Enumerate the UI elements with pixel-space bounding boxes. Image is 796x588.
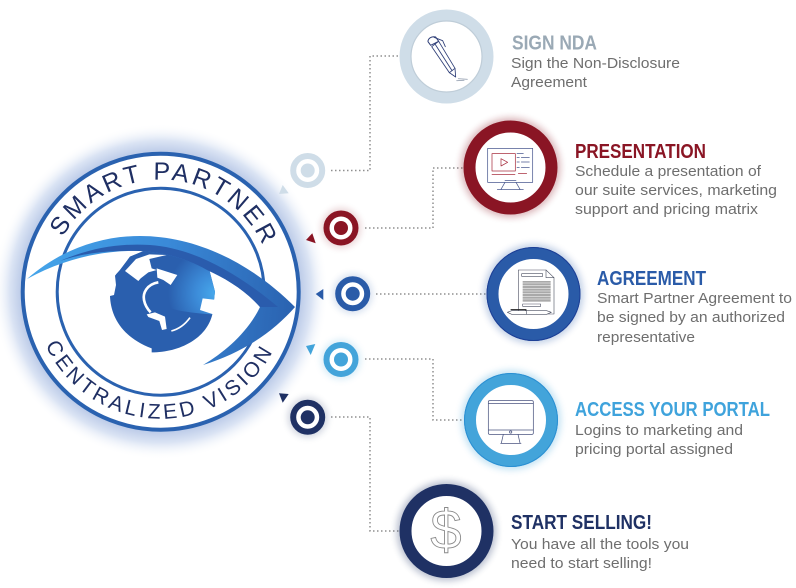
heading: sign NDA: SIGN NDA	[512, 32, 597, 54]
ring glow: access portal	[461, 370, 561, 470]
dotted connector: agreement	[376, 293, 487, 295]
icon: monitor	[488, 401, 533, 443]
ring: presentation	[470, 126, 552, 208]
description: access portal: Logins to marketing and	[575, 422, 743, 439]
badge text: bottom: CENTRALIZED VISION	[48, 341, 272, 419]
description: agreement: Smart Partner Agreement to	[597, 290, 792, 307]
ring: sign NDA	[406, 16, 488, 98]
description: agreement: representative	[597, 329, 695, 346]
description: start selling: need to start selling!	[511, 555, 652, 572]
badge text: top: SMART PARTNER	[50, 162, 276, 244]
ring: access portal	[470, 379, 552, 461]
ring glow: start selling	[396, 481, 496, 581]
step: access portal	[461, 370, 770, 470]
dotted connector: access portal	[365, 359, 464, 420]
step: start selling	[396, 481, 689, 581]
description: sign NDA: Agreement	[511, 74, 588, 91]
badge glow	[0, 124, 329, 460]
heading: start selling: START SELLING!	[511, 512, 652, 534]
description: presentation: our suite services, marketing	[575, 182, 777, 199]
heading: presentation: PRESENTATION	[575, 141, 706, 163]
badge: Smart Partner Centralized Vision	[0, 132, 320, 452]
node: presentation	[306, 208, 361, 248]
ring glow: agreement	[484, 244, 584, 344]
dotted connector: start selling	[331, 417, 400, 531]
step: agreement	[484, 244, 792, 346]
ring glow: presentation	[460, 118, 560, 218]
description: presentation: Schedule a presentation of	[575, 163, 762, 180]
icon: document	[507, 270, 554, 314]
dotted connector: presentation	[365, 168, 464, 228]
eyelid swoosh	[27, 236, 295, 365]
ring edge: access portal	[464, 374, 558, 466]
badge inner ring	[57, 188, 264, 395]
icon: video screen	[488, 148, 533, 190]
node: agreement	[316, 274, 373, 314]
dotted connector: sign NDA	[331, 56, 400, 170]
eyelid inner shade	[60, 245, 278, 307]
description: presentation: support and pricing matrix	[575, 201, 759, 218]
ring: start selling	[406, 490, 488, 572]
step: presentation	[460, 118, 777, 218]
icon: pen	[428, 37, 467, 81]
description: access portal: pricing portal assigned	[575, 441, 733, 458]
step: sign NDA	[406, 16, 680, 98]
ring edge: agreement	[487, 248, 580, 340]
node: sign NDA	[279, 156, 322, 194]
iris	[110, 248, 217, 352]
description: sign NDA: Sign the Non-Disclosure	[511, 55, 680, 72]
description: start selling: You have all the tools you	[511, 536, 689, 553]
icon: dollar: $	[430, 498, 462, 561]
eye	[27, 236, 295, 365]
ring: agreement	[492, 253, 574, 335]
description: agreement: be signed by an authorized	[597, 309, 785, 326]
badge disc	[23, 154, 299, 430]
heading: agreement: AGREEMENT	[597, 268, 706, 290]
node: start selling	[279, 393, 328, 437]
node: access portal	[306, 340, 361, 380]
